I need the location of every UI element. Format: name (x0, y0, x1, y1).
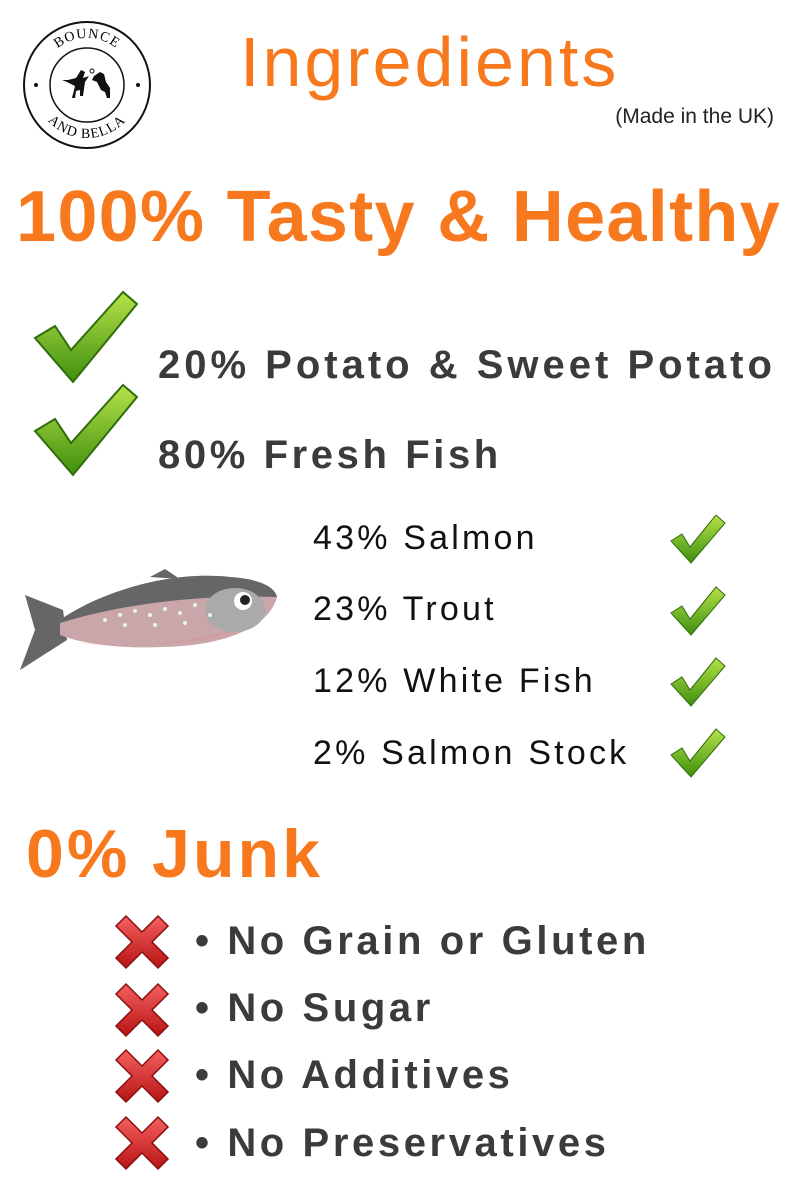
logo: BOUNCE (52, 28, 120, 48)
icon: fish (20, 569, 277, 670)
item: stock: 2% Salmon Stock (313, 734, 629, 772)
subtitle: (Made in the UK) (615, 105, 774, 128)
heading: 0% Junk: 0% Junk (26, 816, 323, 892)
icon: check large 1 (34, 290, 138, 384)
fish list (313, 515, 726, 778)
logo (23, 21, 151, 149)
item: salmon: 43% Salmon (313, 519, 538, 557)
logo: AND BELLA (48, 116, 126, 138)
icon: check large 2 (34, 384, 138, 476)
icons: red crosses (115, 915, 169, 1170)
item: white fish: 12% White Fish (313, 662, 596, 700)
heading: 100% Tasty & Healthy: 100% Tasty & Healthy (16, 177, 781, 257)
junk list: • No Additives (195, 1053, 514, 1097)
junk list: • No Sugar (195, 986, 434, 1030)
text: potato: 20% Potato & Sweet Potato (158, 343, 776, 387)
text: fish: 80% Fresh Fish (158, 433, 502, 477)
title: Ingredients (240, 23, 619, 101)
junk list: • No Grain or Gluten (195, 919, 650, 963)
junk list: • No Preservatives (195, 1121, 610, 1165)
item: trout: 23% Trout (313, 590, 497, 628)
junk list (115, 915, 650, 1170)
small checks (670, 515, 726, 778)
